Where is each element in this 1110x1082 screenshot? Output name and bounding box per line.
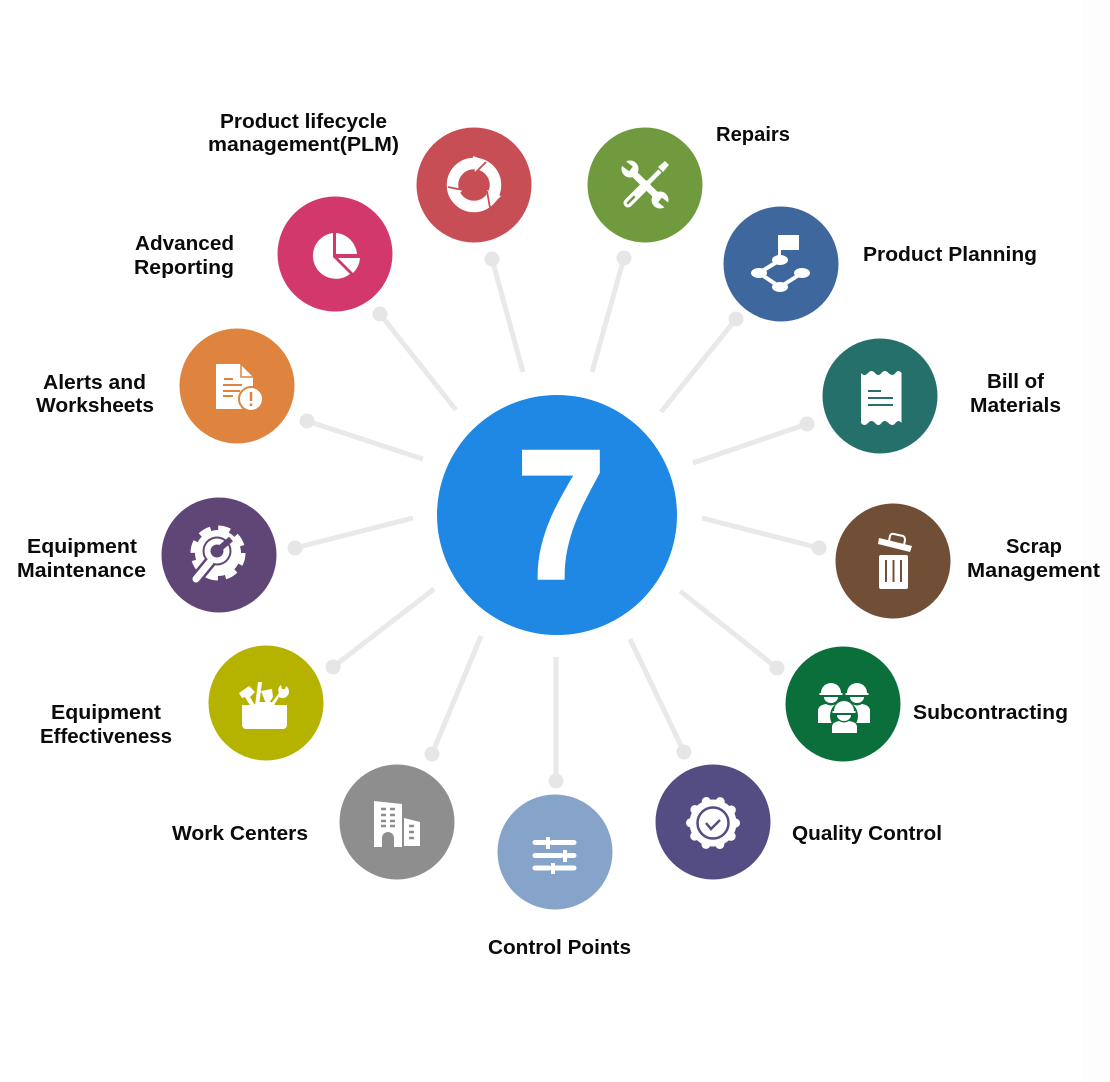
node: Alerts and Worksheets <box>180 328 294 444</box>
labels: Worksheets <box>36 395 154 417</box>
labels: Materials <box>970 395 1061 417</box>
icon: receipt <box>861 371 902 425</box>
icon: sliders <box>535 837 574 874</box>
labels: Management <box>967 560 1100 582</box>
labels: Scrap <box>1006 536 1062 558</box>
node: Bill of Materials <box>822 338 938 454</box>
labels: management(PLM) <box>208 134 399 156</box>
node: Quality Control <box>656 764 770 880</box>
node: Scrap Management <box>836 504 950 618</box>
icon: badge check <box>690 800 736 846</box>
node: Subcontracting <box>786 646 900 762</box>
labels: Product lifecycle <box>220 111 387 133</box>
node: Work Centers <box>340 764 454 880</box>
icon: toolbox <box>239 682 289 729</box>
central number badge <box>437 395 677 635</box>
labels: Advanced <box>135 233 234 255</box>
labels: Work Centers <box>172 823 308 845</box>
labels: Equipment <box>27 536 137 558</box>
labels: Effectiveness <box>40 726 172 748</box>
icon: pie chart <box>313 233 360 279</box>
node: Control Points <box>498 794 612 910</box>
node: Repairs <box>588 128 702 242</box>
icon: cycle arrows <box>448 156 501 208</box>
icon: document alert <box>216 364 263 411</box>
labels: Repairs <box>716 124 790 146</box>
node: Product Planning <box>724 206 838 322</box>
labels: Product Planning <box>863 244 1037 266</box>
labels: Equipment <box>51 702 161 724</box>
icon: gear wrench <box>193 528 243 579</box>
labels <box>17 111 1100 959</box>
node: Equipment Maintenance <box>162 498 276 612</box>
labels: Reporting <box>134 257 234 279</box>
labels: Bill of <box>987 371 1044 393</box>
icon: flag path <box>751 235 810 292</box>
central number badge: 7 <box>518 413 604 616</box>
labels: Subcontracting <box>913 702 1068 724</box>
node: Advanced Reporting <box>278 196 392 312</box>
node: Equipment Effectiveness <box>208 646 324 760</box>
labels: Quality Control <box>792 823 942 845</box>
labels: Alerts and <box>43 372 146 394</box>
labels: Control Points <box>488 937 631 959</box>
icon: wrench and screwdriver <box>622 160 669 208</box>
icon: buildings <box>374 801 420 847</box>
connectors <box>288 250 826 788</box>
icon: workers <box>818 683 870 733</box>
node: Product lifecycle management <box>416 128 532 242</box>
icon: trash can <box>878 534 912 589</box>
labels: Maintenance <box>17 560 146 582</box>
